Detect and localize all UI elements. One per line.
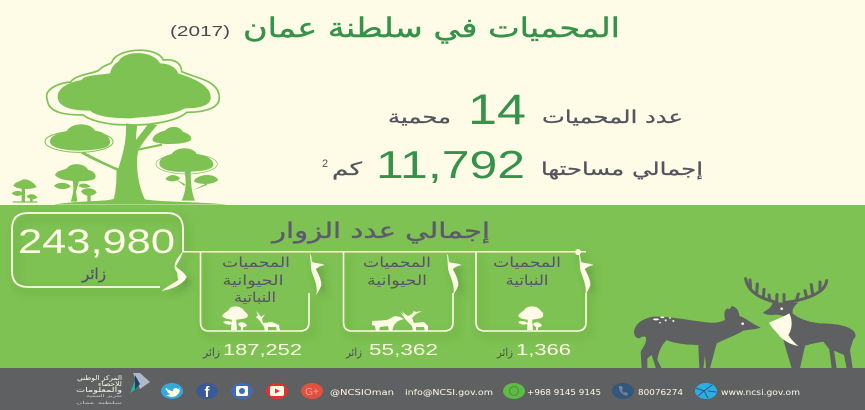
box label: المحميات bbox=[222, 255, 290, 271]
icon: globe bbox=[695, 383, 717, 399]
stag eye and chest bbox=[769, 307, 798, 346]
footer bar bbox=[0, 368, 865, 410]
stat: total area bbox=[322, 144, 703, 187]
icon: two deer bbox=[372, 311, 428, 331]
doe bbox=[634, 306, 761, 368]
background: green visitors area bbox=[0, 205, 865, 368]
large tree crown bbox=[47, 50, 219, 125]
right tree bbox=[156, 148, 218, 201]
illustration: trees bbox=[12, 50, 228, 205]
phone number mobile: +968 9145 9145 bbox=[527, 388, 601, 397]
total box outline bbox=[12, 213, 187, 291]
stat: number of reserves bbox=[388, 86, 683, 134]
icon: phone bbox=[612, 383, 634, 399]
right upper foliage bbox=[152, 127, 191, 144]
year label: (2017) bbox=[170, 23, 230, 40]
logo text: والمعلومات bbox=[76, 386, 122, 394]
icon: google plus bbox=[301, 383, 323, 399]
icon: instagram bbox=[231, 383, 253, 399]
total number: 243,980 bbox=[18, 223, 175, 261]
logo text: المركز الوطني bbox=[77, 374, 122, 382]
stag bbox=[746, 279, 856, 368]
antlers bbox=[746, 279, 827, 303]
visitor word: زائر bbox=[202, 346, 220, 359]
large tree trunk bbox=[53, 123, 228, 205]
unit: square km: كم bbox=[332, 159, 363, 180]
visitor word: زائر bbox=[81, 265, 106, 283]
unit: reserve: محمية bbox=[388, 107, 451, 128]
icon: google plus: G+ bbox=[305, 387, 319, 398]
visitor word: زائر bbox=[496, 346, 513, 359]
superscript 2: 2 bbox=[322, 158, 328, 170]
number 14: 14 bbox=[468, 86, 526, 134]
box label: النباتية bbox=[234, 290, 276, 306]
divider line bbox=[182, 251, 586, 252]
email: info@NCSI.gov.om bbox=[405, 388, 493, 397]
icon: twitter bbox=[161, 383, 183, 399]
box label bbox=[363, 255, 431, 289]
doe eye and spots bbox=[653, 316, 744, 325]
panel: plant reserves bbox=[476, 249, 594, 359]
icon: facebook: f bbox=[204, 384, 210, 401]
visitors number: 187,252 bbox=[223, 342, 302, 359]
logo text: تعزيز التنمية bbox=[86, 393, 122, 398]
background: cream upper area bbox=[0, 0, 865, 206]
label: number of reserves: عدد المحميات bbox=[542, 107, 683, 128]
box outline bbox=[200, 251, 325, 331]
visitor word: زائر bbox=[345, 346, 362, 359]
box outline bbox=[476, 249, 594, 331]
logo mark bbox=[130, 373, 150, 393]
tiny tree bbox=[12, 179, 37, 203]
logo text bbox=[76, 374, 123, 405]
icon: tree bbox=[518, 306, 543, 330]
number 11,792: 11,792 bbox=[376, 144, 525, 187]
panel: plant and animal reserves bbox=[200, 251, 325, 359]
visitors number: 55,362 bbox=[369, 342, 438, 359]
social handle: @NCSIOman bbox=[330, 388, 394, 397]
website: www.ncsi.gov.om bbox=[721, 388, 800, 397]
label: total area: إجمالي مساحتها bbox=[541, 159, 703, 180]
icon: tree and stag bbox=[222, 306, 280, 331]
logo text: للإحصاء bbox=[98, 380, 122, 388]
left branch foliage bbox=[45, 124, 113, 152]
icon: whatsapp bbox=[503, 383, 525, 399]
panel: animal reserves bbox=[344, 251, 462, 359]
small tree bbox=[54, 164, 97, 202]
visitors number: 1,366 bbox=[516, 342, 571, 359]
box label: الحيوانية bbox=[367, 273, 427, 289]
title: المحميات في سلطنة عمان bbox=[243, 13, 620, 44]
box outline bbox=[344, 251, 462, 331]
box label bbox=[493, 255, 561, 289]
box label: النباتية bbox=[506, 273, 548, 289]
icon: youtube bbox=[266, 383, 288, 399]
heading: total visitors: إجمالي عدد الزوار bbox=[271, 219, 490, 244]
logo text: سلطنة عمان bbox=[76, 400, 123, 405]
box label bbox=[222, 255, 290, 306]
logo bbox=[76, 373, 150, 405]
box label: المحميات bbox=[363, 255, 431, 271]
panel: total visitors bbox=[12, 213, 187, 291]
hotline number: 80076274 bbox=[638, 388, 683, 397]
illustration: deer pair bbox=[634, 279, 856, 368]
icon: facebook bbox=[196, 383, 218, 401]
box label: المحميات bbox=[493, 255, 561, 271]
box label: الحيوانية bbox=[222, 273, 284, 289]
